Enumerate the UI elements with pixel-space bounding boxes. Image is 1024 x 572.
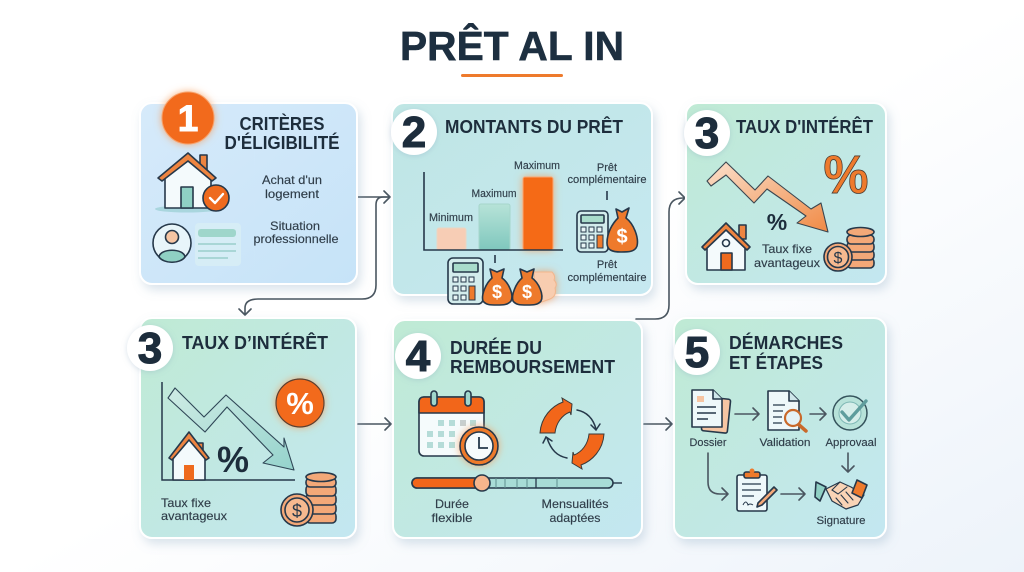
label: prêt complémentaire bottom <box>568 259 646 284</box>
heading <box>729 332 843 373</box>
text: taux fixe avantageux: Taux fixe <box>762 242 812 256</box>
text: taux fixe avantageux <box>161 496 227 523</box>
text: mensualités adaptées: Mensualités <box>542 497 608 511</box>
text: achat d'un logement <box>262 173 322 201</box>
bar chart <box>424 160 563 250</box>
bar chart: Maximum <box>472 188 516 200</box>
heading: MONTANTS DU PRÊT <box>445 116 623 137</box>
label: prêt complémentaire bottom: Prêt <box>597 259 617 271</box>
arrow: panel 1 to lower row <box>239 197 389 315</box>
panel: durée du remboursement <box>393 320 642 538</box>
text: taux fixe avantageux: avantageux <box>754 256 820 270</box>
text: durée flexible <box>432 497 473 525</box>
heading <box>450 337 615 377</box>
badge 5 <box>674 328 720 377</box>
icon: cycle arrows <box>540 398 604 469</box>
bar chart: Maximum <box>514 160 560 172</box>
arrow <box>781 488 805 500</box>
icon: calculator and money bags bottom <box>448 255 556 305</box>
icon: validation document <box>768 391 806 431</box>
text: durée flexible: Durée <box>435 497 469 511</box>
icon: coins: $ <box>834 250 843 267</box>
icon: calendar and clock <box>419 391 498 465</box>
title: PRÊT AL IN <box>400 23 624 69</box>
heading <box>224 113 340 153</box>
badge 1 <box>162 92 214 144</box>
text: taux fixe avantageux: avantageux <box>161 509 227 523</box>
small percent: % <box>767 209 787 235</box>
panel: montants du prêt <box>391 103 652 305</box>
chart: falling rate <box>162 382 295 480</box>
icon: falling arrow <box>707 162 828 232</box>
panel: critères d'éligibilité <box>140 92 357 284</box>
panel: taux d'intérêt top <box>684 103 886 284</box>
text: signature: Signature <box>816 515 866 527</box>
icon: dossier <box>692 390 731 433</box>
text: situation professionnelle: professionnelle <box>254 232 339 246</box>
heading: TAUX D'INTÉRÊT <box>736 116 873 137</box>
arrow <box>735 408 759 420</box>
icon: house <box>169 432 209 480</box>
text: mensualités adaptées <box>542 497 608 525</box>
badge 1: 1 <box>178 98 198 139</box>
large percent: % <box>217 439 249 480</box>
icon: large percent: % <box>824 145 868 205</box>
label: prêt complémentaire top: Prêt <box>597 162 617 174</box>
badge 3: 3 <box>138 324 162 373</box>
arrow: panel 1 to panel 2 <box>358 191 390 203</box>
badge 4: 4 <box>406 332 431 381</box>
icon: handshake <box>815 480 867 509</box>
heading: DÉMARCHES <box>729 332 843 353</box>
icon: calculator and money bags bottom: $ <box>522 282 532 302</box>
slider <box>412 475 622 491</box>
heading: CRITÈRES <box>240 113 324 134</box>
arrow <box>810 408 826 420</box>
heading: REMBOURSEMENT <box>450 357 615 377</box>
text: validation: Validation <box>760 437 810 449</box>
badge 3: 3 <box>695 109 719 158</box>
icon: coins <box>824 228 874 271</box>
panel: taux d'intérêt bottom <box>127 318 356 538</box>
heading: DURÉE DU <box>450 337 542 358</box>
icon: percent badge <box>276 379 324 427</box>
text: situation professionnelle <box>254 219 339 246</box>
icon: calculator and bag right <box>577 208 637 252</box>
label: prêt complémentaire top: complémentaire <box>568 174 646 186</box>
text: achat d'un logement: logement <box>265 187 320 201</box>
label: prêt complémentaire top <box>568 162 646 200</box>
text: taux fixe avantageux: Taux fixe <box>161 496 211 510</box>
arrow: lower row up to panel 3 <box>636 192 685 319</box>
badge 3 <box>127 324 173 373</box>
badge 4 <box>395 332 441 381</box>
heading: TAUX D’INTÉRÊT <box>182 332 328 353</box>
arrow: dossier to clipboard <box>708 453 728 500</box>
heading: ET ÉTAPES <box>729 352 823 373</box>
icon: approval check <box>833 396 867 430</box>
text: approvaal: Approvaal <box>826 437 876 449</box>
icon: calculator and money bags bottom: $ <box>492 282 502 302</box>
text: dossier: Dossier <box>690 437 727 449</box>
bar chart: Minimum <box>429 212 473 224</box>
label: prêt complémentaire bottom: complémentaire <box>568 272 646 284</box>
icon: house <box>702 223 750 270</box>
text: taux fixe avantageux <box>754 242 820 270</box>
icon: coins <box>281 472 336 526</box>
text: achat d'un logement: Achat d'un <box>262 173 322 187</box>
icon: coins: $ <box>292 501 302 521</box>
heading: D'ÉLIGIBILITÉ <box>224 132 340 153</box>
badge 2: 2 <box>402 108 426 157</box>
badge 2 <box>391 108 437 157</box>
arrow: panel 4 to panel 5 <box>358 418 391 430</box>
arrow: approval to signature <box>842 453 854 472</box>
arrow: panel 5 to panel 6 <box>644 418 672 430</box>
badge 3 <box>684 109 730 158</box>
text: durée flexible: flexible <box>432 511 473 525</box>
icon: house with check <box>155 153 229 212</box>
icon: profile card <box>153 223 241 266</box>
text: situation professionnelle: Situation <box>270 219 320 233</box>
panel: démarches et étapes <box>674 318 886 538</box>
badge 5: 5 <box>685 328 709 377</box>
text: mensualités adaptées: adaptées <box>550 511 600 525</box>
icon: clipboard <box>737 468 777 511</box>
icon: percent badge: % <box>286 386 314 421</box>
icon: calculator and bag right: $ <box>616 226 628 248</box>
